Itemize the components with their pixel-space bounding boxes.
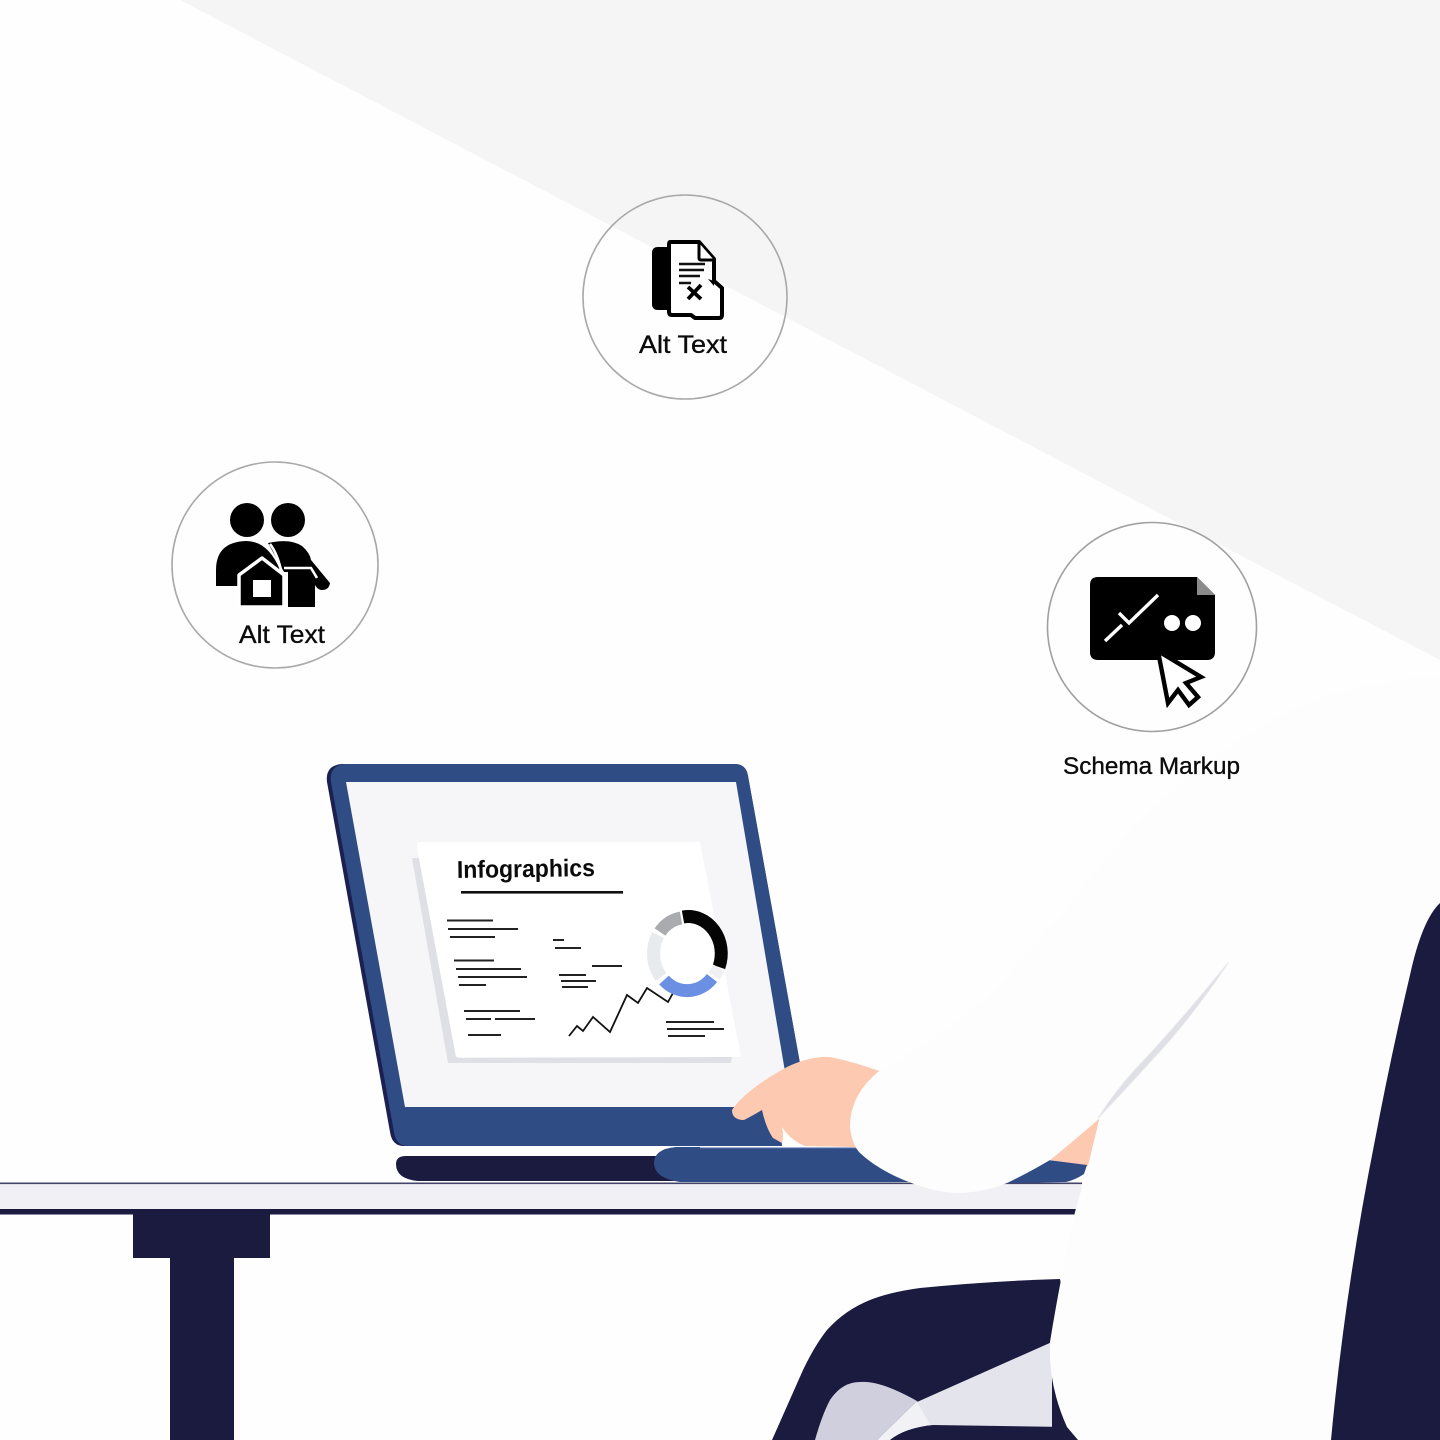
shirt torso and sleeve [850,675,1440,1440]
desk top [0,1184,1082,1209]
text lines [447,920,724,1036]
document shadow [412,858,732,1063]
far cuff [1007,1160,1087,1183]
label: schema markup: Schema Markup [1063,753,1240,780]
panel: alt text badge top [583,195,787,399]
badge circle [1048,522,1256,732]
document page [417,842,741,1057]
icon: people and house [216,503,330,607]
chair seat back [772,1279,1090,1440]
desk front edge [0,1182,1082,1184]
badge circle [172,462,378,668]
desk underside [0,1209,1078,1214]
panel: alt text badge left [172,462,378,668]
chair lavender cushion [815,1382,917,1440]
far forearm [1050,1116,1100,1166]
label: alt text: Alt Text [639,331,727,359]
heading: infographics: Infographics [457,855,595,884]
laptop base rear [396,1156,680,1181]
panel: schema markup badge right [1048,522,1256,780]
chair back right [1331,903,1440,1440]
heading underline [461,891,623,894]
badge circle [583,195,787,399]
laptop bezel [331,764,803,1146]
label: alt text: Alt Text [239,621,325,649]
chair white trim [877,1401,933,1440]
donut chart [654,917,721,991]
laptop screen [346,782,791,1107]
panel: desk [0,1182,1082,1440]
desk leg [170,1258,234,1440]
panel: person [732,675,1440,1440]
icon: card with cursor [1090,577,1215,705]
hand [732,1057,882,1147]
background diagonal wedge [180,0,1440,660]
desk leg bracket [133,1214,270,1258]
document on screen [412,842,741,1063]
line chart [569,988,673,1036]
deck highlight [700,1147,860,1148]
laptop lid edge [327,764,803,1146]
laptop base keyboard deck [654,1147,1000,1182]
chair lower dark [890,1425,1078,1440]
chair light panel [917,1342,1052,1430]
panel: chair [772,1279,1090,1440]
gap below the hand [781,1125,860,1146]
icon: document with x [652,242,722,318]
panel: laptop [327,764,1000,1182]
shirt crease [1098,963,1228,1118]
